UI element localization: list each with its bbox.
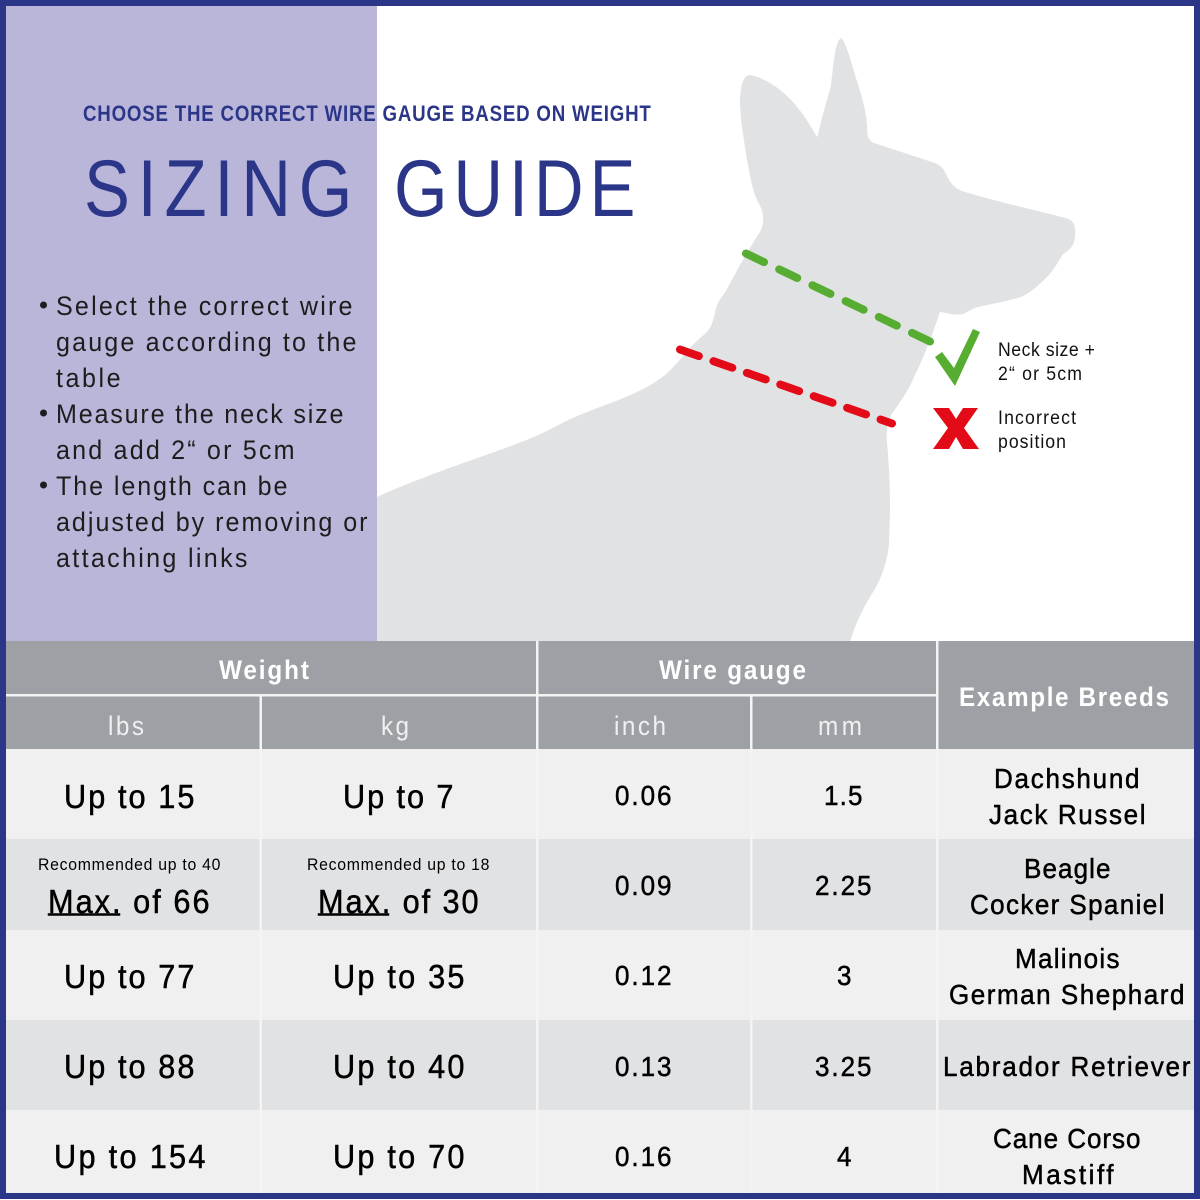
header labels: lbs [108, 712, 144, 741]
example breeds column: Dachshund [994, 763, 1140, 794]
header labels: Weight [219, 656, 309, 685]
weight in lbs column: Max. of 66 [48, 883, 210, 920]
header labels: inch [614, 712, 666, 741]
wire gauge inch column: 0.12 [615, 960, 672, 991]
legend: incorrect position label: Incorrect [998, 406, 1076, 428]
example breeds column: Cane Corso [993, 1123, 1140, 1154]
instructions bullet list: Measure the neck size [56, 398, 343, 429]
header labels: kg [381, 712, 409, 741]
weight in kg column: Recommended up to 18 [307, 856, 489, 874]
header labels [108, 656, 1169, 741]
instructions bullet list [40, 290, 368, 573]
wire gauge mm column: 3.25 [815, 1051, 872, 1082]
title: GUIDE [394, 143, 635, 233]
weight in lbs column: Up to 15 [64, 778, 194, 815]
example breeds column: Jack Russel [989, 799, 1146, 830]
legend: correct position label [998, 338, 1095, 384]
weight in kg column: Up to 40 [333, 1048, 465, 1085]
title [84, 143, 635, 233]
red dashed incorrect collar line [680, 350, 892, 424]
legend: correct position label: Neck size + [998, 338, 1095, 360]
legend: correct position label: 2“ or 5cm [998, 362, 1082, 384]
instructions bullet list: attaching links [56, 542, 247, 573]
wire gauge mm column [815, 780, 872, 1172]
wire gauge inch column: 0.09 [615, 870, 672, 901]
wire gauge inch column: 0.06 [615, 780, 672, 811]
weight in kg column: Up to 7 [343, 778, 453, 815]
example breeds column: Malinois [1015, 943, 1120, 974]
icon: green check mark [935, 329, 980, 386]
example breeds column: Cocker Spaniel [970, 889, 1164, 920]
weight in lbs column: Up to 77 [64, 958, 194, 995]
weight in kg column [307, 778, 489, 1175]
wire gauge inch column: 0.16 [615, 1141, 672, 1172]
panel: purple left background [6, 6, 377, 642]
title: SIZING [84, 143, 352, 233]
icon: red cross [933, 408, 979, 449]
header labels: Wire gauge [659, 656, 806, 685]
example breeds column: Beagle [1024, 853, 1110, 884]
header labels: mm [818, 712, 862, 741]
instructions bullet list: gauge according to the [56, 326, 356, 357]
green dashed correct collar line [746, 254, 930, 342]
weight in lbs column [38, 778, 220, 1175]
wire gauge mm column: 3 [837, 960, 851, 991]
weight in lbs column: Recommended up to 40 [38, 856, 220, 874]
table header background [6, 641, 1194, 749]
example breeds column: Mastiff [1022, 1159, 1114, 1190]
wire gauge mm column: 2.25 [815, 870, 872, 901]
example breeds column: Labrador Retriever [943, 1051, 1190, 1082]
instructions bullet list: The length can be [56, 470, 287, 501]
legend: incorrect position label: position [998, 430, 1066, 452]
weight in kg column: Up to 35 [333, 958, 465, 995]
instructions bullet list: Select the correct wire [56, 290, 352, 321]
wire gauge mm column: 4 [837, 1141, 851, 1172]
example breeds column: German Shephard [949, 979, 1184, 1010]
wire gauge inch column: 0.13 [615, 1051, 672, 1082]
legend: incorrect position label [998, 406, 1076, 452]
subtitle: CHOOSE THE CORRECT WIRE GAUGE BASED ON WEIGHT [83, 103, 651, 126]
table row backgrounds [6, 749, 1194, 1194]
weight in lbs column: Up to 88 [64, 1048, 194, 1085]
weight in kg column: Up to 70 [333, 1138, 465, 1175]
instructions bullet list: and add 2“ or 5cm [56, 434, 295, 465]
weight in lbs column: Up to 154 [54, 1138, 205, 1175]
sizing table [6, 641, 1194, 1194]
header labels: Example Breeds [959, 683, 1169, 712]
instructions bullet list: table [56, 362, 121, 393]
dog silhouette [377, 38, 1075, 642]
weight in kg column: Max. of 30 [318, 883, 479, 920]
example breeds column [943, 763, 1190, 1190]
wire gauge inch column [615, 780, 672, 1172]
wire gauge mm column: 1.5 [824, 780, 863, 811]
instructions bullet list: adjusted by removing or [56, 506, 368, 537]
